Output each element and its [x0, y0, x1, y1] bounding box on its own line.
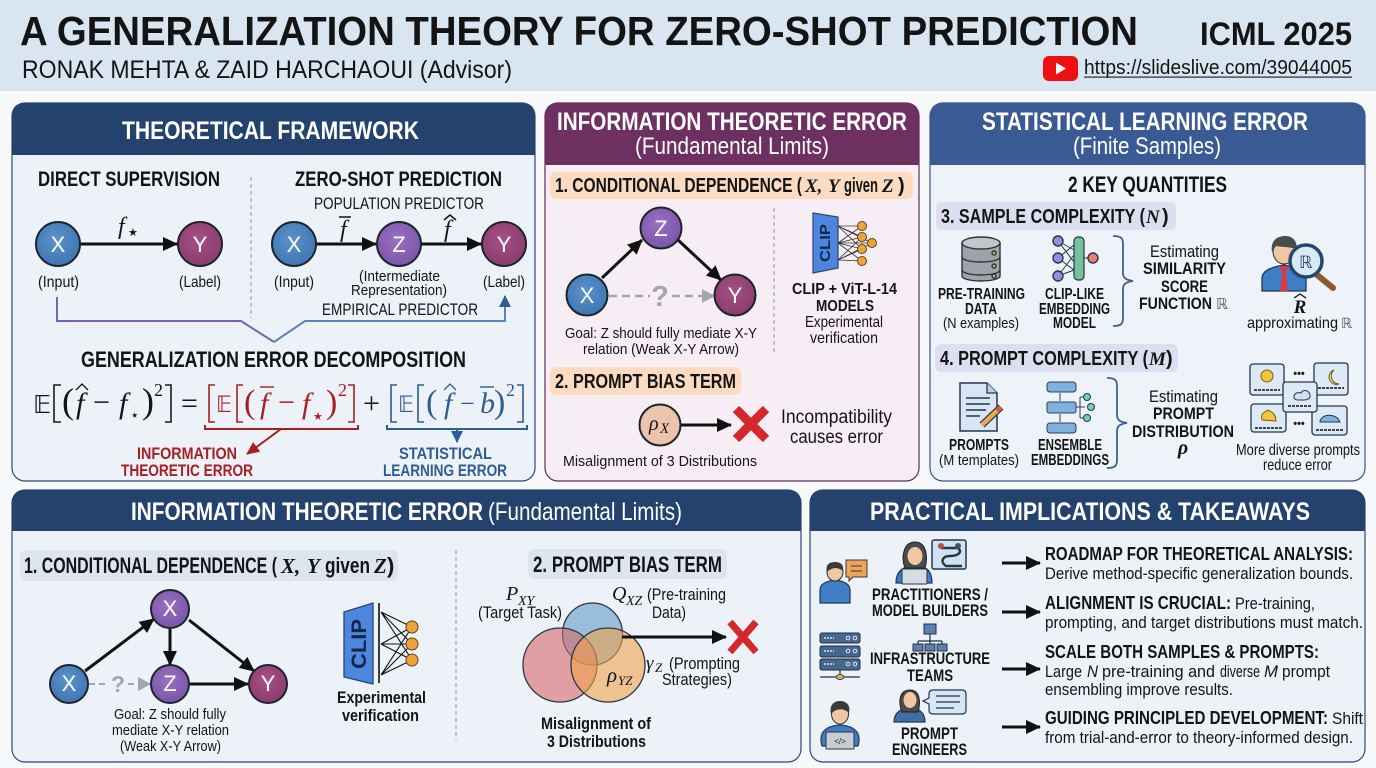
- diagram: zero-shot prediction: [272, 215, 526, 299]
- label: target task: (Target Task): [478, 604, 562, 622]
- label: target task: [478, 583, 562, 622]
- similarity score label: Estimating: [1150, 243, 1219, 261]
- heading: INFORMATION THEORETIC ERROR: [131, 498, 483, 526]
- section 2 heading: [550, 367, 741, 395]
- diagram: mediation graph: X: [163, 596, 178, 621]
- pre-training data label: [938, 286, 1025, 332]
- diagram: prompt bias: ρ: [648, 413, 659, 435]
- equation: =: [181, 387, 198, 420]
- diagram: mediation triangle: Z: [654, 216, 668, 241]
- embedding model label: [1039, 286, 1110, 332]
- prompts label: [939, 437, 1019, 469]
- equation: f: [444, 387, 456, 420]
- label: pre-training data: Q: [612, 583, 627, 605]
- label: pre-training data: Data): [652, 604, 686, 622]
- embedding model label: MODEL: [1053, 315, 1096, 332]
- icon: diverse prompt cards: •••: [1293, 368, 1305, 380]
- label: prompting strategies: γ: [646, 653, 654, 674]
- diagram: zero-shot prediction: (Label): [483, 274, 525, 291]
- takeaway: scale: N: [1087, 662, 1099, 681]
- diagram: mediation triangle: X: [580, 283, 595, 308]
- diagram: direct supervision: Y: [193, 232, 208, 257]
- diagram: zero-shot prediction: (Input): [274, 274, 314, 291]
- audience label: prompt engineers: ENGINEERS: [892, 741, 967, 759]
- ensemble label: EMBEDDINGS: [1031, 452, 1109, 469]
- diagram: zero-shot prediction: f: [340, 217, 350, 243]
- icon: embedding network: [1053, 236, 1098, 281]
- icon: CLIP network: CLIP: [817, 224, 834, 262]
- takeaway: alignment: Pre-training,: [1235, 594, 1315, 613]
- equation: (: [426, 384, 437, 421]
- equation: −: [93, 386, 110, 419]
- icon: woman with prompt bubble: [894, 690, 966, 722]
- equation: 𝔼: [398, 393, 414, 418]
- section 1 heading: Y: [307, 554, 322, 578]
- diagram: mediation triangle: ?: [651, 281, 669, 313]
- label: prompting strategies: [646, 653, 740, 689]
- callout: statistical learning error: LEARNING ERROR: [383, 461, 507, 480]
- takeaway: scale: Large: [1045, 662, 1082, 681]
- equation: [33, 380, 523, 424]
- diagram: prompt bias: [640, 404, 766, 446]
- section 1 heading: ): [387, 553, 394, 578]
- arrow: guiding: [1002, 726, 1040, 728]
- label: prompting strategies: Strategies): [662, 671, 732, 689]
- takeaway: scale: SCALE BOTH SAMPLES & PROMPTS:: [1045, 642, 1319, 662]
- takeaway: guiding: [1045, 708, 1363, 747]
- models caption: CLIP + ViT-L-14: [792, 281, 897, 298]
- section 1 heading: given: [844, 175, 878, 197]
- diagram: zero-shot prediction: Representation): [351, 282, 447, 299]
- label: pre-training data: XZ: [625, 594, 643, 609]
- audience label: infrastructure: INFRASTRUCTURE: [870, 650, 990, 668]
- icon: CLIP network: [344, 603, 418, 684]
- equation: f: [119, 387, 131, 420]
- takeaway: alignment: ALIGNMENT IS CRUCIAL:: [1045, 593, 1231, 613]
- section 1 heading: Z: [373, 554, 387, 578]
- audience label: prompt engineers: [892, 725, 967, 759]
- takeaway: scale: diverse: [1220, 662, 1260, 681]
- section 1 heading: 1. CONDITIONAL DEPENDENCE (: [555, 175, 802, 197]
- prompt distribution label: [1132, 388, 1234, 459]
- models caption: [792, 281, 897, 347]
- heading subtitle: (Finite Samples): [1073, 133, 1221, 160]
- equation: −: [278, 386, 295, 419]
- section 3 heading: 3. SAMPLE COMPLEXITY (: [941, 206, 1145, 228]
- prompt distribution label: ρ: [1177, 437, 1188, 459]
- key quantities heading: 2 KEY QUANTITIES: [1068, 172, 1227, 197]
- section 2 heading: 2. PROMPT BIAS TERM: [555, 371, 736, 393]
- diagram: zero-shot prediction: Y: [497, 232, 512, 257]
- icon: video play button: [1043, 56, 1078, 81]
- chart: venn diagram of distributions: [523, 603, 756, 702]
- arrow: scale: [1002, 668, 1040, 670]
- section 3 heading: ): [1162, 206, 1169, 228]
- heading: INFORMATION THEORETIC ERROR: [557, 108, 907, 136]
- incompatibility note: Incompatibility: [781, 407, 892, 428]
- models caption: Experimental: [805, 314, 883, 331]
- population predictor label: POPULATION PREDICTOR: [314, 194, 484, 213]
- misalignment caption: Misalignment of: [541, 714, 651, 733]
- pre-training data label: PRE-TRAINING: [938, 286, 1025, 303]
- icon: coder with laptop: </>: [834, 737, 846, 746]
- audience label: infrastructure: [870, 650, 990, 685]
- callout: statistical learning error: STATISTICAL: [399, 444, 492, 463]
- diagram: zero-shot prediction: Z: [392, 232, 406, 257]
- icon: CLIP network: CLIP: [348, 619, 371, 669]
- goal caption: relation (Weak X-Y Arrow): [583, 341, 739, 358]
- prompts label: PROMPTS: [949, 437, 1009, 454]
- goal caption: mediate X-Y relation: [112, 722, 229, 739]
- arrow: roadmap: [1002, 562, 1040, 564]
- subheading: zero-shot prediction: ZERO-SHOT PREDICTION: [295, 168, 502, 191]
- diagram: mediation graph: [50, 590, 287, 703]
- section 3 heading: N: [1145, 207, 1161, 228]
- diagram: prompt bias: X: [659, 421, 670, 437]
- similarity score label: FUNCTION: [1139, 294, 1212, 313]
- equation: (: [244, 384, 255, 421]
- callout: statistical learning error: [383, 425, 527, 480]
- audience label: prompt engineers: PROMPT: [901, 725, 958, 743]
- equation: 2: [506, 380, 515, 400]
- takeaway: scale: [1045, 642, 1330, 699]
- equation: 2: [338, 380, 347, 400]
- arrow: purple and blue connector: [57, 296, 505, 342]
- goal caption: [565, 325, 757, 358]
- callout: information theoretic error: INFORMATION: [137, 444, 237, 463]
- icon: person with magnifier: ℝ: [1299, 253, 1313, 273]
- section 1 heading: 1. CONDITIONAL DEPENDENCE (: [24, 553, 277, 578]
- models caption: verification: [810, 330, 878, 347]
- approximating label: ℝ: [1341, 316, 1353, 332]
- diagram: direct supervision: [36, 214, 222, 291]
- approximating label: [1247, 294, 1353, 332]
- takeaway: scale: pre-training and: [1102, 662, 1215, 681]
- diagram: mediation graph: X: [62, 671, 77, 696]
- diagram: mediation triangle: [566, 208, 756, 316]
- heading: PRACTICAL IMPLICATIONS & TAKEAWAYS: [870, 498, 1310, 526]
- misalignment caption: Misalignment of 3 Distributions: [563, 453, 757, 470]
- goal caption: (Weak X-Y Arrow): [120, 738, 221, 755]
- chart: venn diagram of distributions: YZ: [618, 673, 633, 688]
- icon: person with magnifier: [1262, 236, 1333, 291]
- experimental verification caption: [337, 688, 426, 725]
- audience label: infrastructure: TEAMS: [907, 667, 953, 685]
- diagram: mediation graph: Y: [261, 671, 276, 696]
- label: prompting strategies: Z: [655, 660, 663, 675]
- equation: 2: [154, 380, 163, 400]
- ensemble label: [1031, 437, 1109, 469]
- takeaway: scale: prompt: [1282, 662, 1330, 681]
- equation: 𝔼: [216, 393, 232, 418]
- icon: diverse prompt cards: •••: [1293, 418, 1305, 430]
- takeaway: alignment: [1045, 593, 1363, 632]
- takeaway: roadmap: [1045, 544, 1353, 583]
- panel: information theoretic error (top): [545, 103, 919, 481]
- prompts label: (M templates): [939, 452, 1019, 469]
- subheading: direct supervision: DIRECT SUPERVISION: [38, 168, 220, 191]
- diagram: mediation triangle: Y: [728, 283, 743, 308]
- pre-training data label: (N examples): [943, 315, 1019, 332]
- embedding model label: EMBEDDING: [1039, 301, 1110, 318]
- heading: (Fundamental Limits): [488, 498, 682, 526]
- experimental verification caption: Experimental: [337, 688, 426, 707]
- heading subtitle: (Fundamental Limits): [635, 133, 829, 160]
- label: pre-training data: (Pre-training: [647, 586, 726, 604]
- incompatibility note: causes error: [790, 427, 884, 448]
- heading: THEORETICAL FRAMEWORK: [122, 117, 419, 145]
- heading: generalization error decomposition: GENERALIZATION ERROR DECOMPOSITION: [81, 347, 466, 372]
- icon: ensemble embeddings: [1047, 382, 1094, 433]
- heading: STATISTICAL LEARNING ERROR: [982, 108, 1308, 136]
- similarity score label: ℝ: [1216, 295, 1228, 313]
- panel: theoretical framework: [12, 103, 535, 481]
- audience label: practitioners: MODEL BUILDERS: [872, 602, 988, 620]
- equation: −: [460, 389, 475, 418]
- diagram: mediation graph: ?: [111, 671, 125, 697]
- icon: organisation tree: [913, 624, 947, 651]
- icon: CLIP network: [813, 213, 876, 273]
- experimental verification caption: verification: [342, 706, 419, 725]
- goal caption: Goal: Z should fully mediate X-Y: [565, 325, 757, 342]
- diagram: zero-shot prediction: (Intermediate: [359, 268, 440, 285]
- callout: information theoretic error: [121, 425, 358, 480]
- diagram: direct supervision: f: [118, 214, 128, 240]
- models caption: MODELS: [816, 298, 874, 315]
- equation: ★: [313, 411, 323, 423]
- pre-training data label: DATA: [965, 301, 997, 318]
- arrow: alignment: [1002, 610, 1040, 614]
- diagram: zero-shot prediction: X: [287, 232, 302, 257]
- diverse prompts caption: reduce error: [1263, 457, 1333, 474]
- takeaway: scale: ensembling improve results.: [1045, 680, 1233, 699]
- icon: coder with laptop: [821, 701, 859, 749]
- audience label: practitioners: [872, 586, 988, 620]
- icon: database: [962, 237, 1000, 281]
- section 1 heading: given: [325, 553, 370, 578]
- label: pre-training data: [612, 583, 726, 622]
- empirical predictor label: EMPIRICAL PREDICTOR: [322, 300, 478, 319]
- label: target task: XY: [517, 594, 537, 609]
- incompatibility note: [781, 407, 892, 448]
- section 2 heading: [528, 549, 727, 579]
- section 1 heading: X,: [280, 554, 300, 578]
- equation: 𝔼: [33, 390, 51, 419]
- panel: practical implications: [810, 490, 1365, 762]
- prompt distribution label: DISTRIBUTION: [1132, 422, 1234, 441]
- icon: prompt document: [960, 383, 1001, 431]
- equation: ⋆: [130, 407, 139, 424]
- diagram: zero-shot prediction: f: [444, 217, 454, 243]
- audience label: practitioners: PRACTITIONERS /: [872, 586, 988, 604]
- section 1 heading: Y: [828, 176, 842, 197]
- section 4 heading: 4. PROMPT COMPLEXITY (: [940, 348, 1148, 370]
- label: target task: P: [505, 583, 518, 605]
- diagram: direct supervision: ★: [128, 227, 138, 239]
- label: prompting strategies: (Prompting: [669, 655, 740, 673]
- misalignment caption: [541, 714, 651, 751]
- section 1 heading: ): [898, 175, 905, 197]
- diagram: direct supervision: X: [51, 232, 66, 257]
- equation: f: [260, 387, 272, 420]
- panel: statistical learning error: [930, 103, 1365, 481]
- section 2 heading: 2. PROMPT BIAS TERM: [533, 552, 722, 577]
- chart: venn diagram of distributions: ρ: [606, 663, 617, 687]
- equation: ): [326, 384, 337, 421]
- section 4 heading: ): [1166, 348, 1173, 370]
- callout: information theoretic error: THEORETIC ERROR: [121, 461, 253, 480]
- header banner: [0, 0, 1376, 91]
- takeaway: scale: M: [1264, 662, 1279, 681]
- conference label: ICML 2025: [1200, 16, 1352, 52]
- icon: man with speech bubble: [820, 560, 867, 603]
- misalignment caption: 3 Distributions: [547, 732, 646, 751]
- approximating label: R: [1293, 297, 1306, 318]
- equation: f: [302, 387, 314, 420]
- similarity score label: SIMILARITY: [1143, 259, 1227, 278]
- diagram: direct supervision: (Label): [179, 274, 221, 291]
- equation: f: [76, 387, 88, 420]
- equation: ): [494, 384, 505, 421]
- equation: ): [142, 381, 154, 421]
- goal caption: Goal: Z should fully: [114, 706, 226, 723]
- icon: diverse prompt cards: [1250, 363, 1348, 435]
- prompt distribution label: Estimating: [1149, 388, 1218, 406]
- title: A GENERALIZATION THEORY FOR ZERO-SHOT PREDICTION: [20, 8, 1138, 54]
- equation: +: [363, 387, 380, 420]
- equation: (: [62, 381, 74, 421]
- prompt distribution label: PROMPT: [1153, 404, 1215, 423]
- similarity score label: [1139, 243, 1228, 313]
- embedding model label: CLIP-LIKE: [1045, 286, 1104, 303]
- takeaway: guiding: GUIDING PRINCIPLED DEVELOPMENT:: [1045, 708, 1328, 728]
- diagram: direct supervision: (Input): [38, 274, 79, 291]
- section 4 heading: M: [1148, 349, 1167, 370]
- goal caption: [112, 706, 229, 755]
- icon: server rack: [820, 633, 860, 680]
- icon: woman with laptop and route map: [896, 540, 966, 584]
- equation: b: [480, 387, 495, 420]
- ensemble label: ENSEMBLE: [1038, 437, 1102, 454]
- diagram: mediation graph: Z: [163, 671, 177, 696]
- approximating label: approximating: [1247, 315, 1338, 332]
- video link: https://slideslive.com/39044005: [1084, 57, 1352, 79]
- panel: information theoretic error (bottom): [12, 490, 801, 762]
- section 1 heading: Z: [881, 176, 894, 197]
- authors: RONAK MEHTA & ZAID HARCHAOUI (Advisor): [22, 56, 512, 84]
- section 1 heading: X,: [804, 176, 822, 197]
- similarity score label: SCORE: [1161, 277, 1208, 296]
- takeaway: guiding: Shift: [1332, 709, 1363, 728]
- diverse prompts caption: [1236, 442, 1360, 474]
